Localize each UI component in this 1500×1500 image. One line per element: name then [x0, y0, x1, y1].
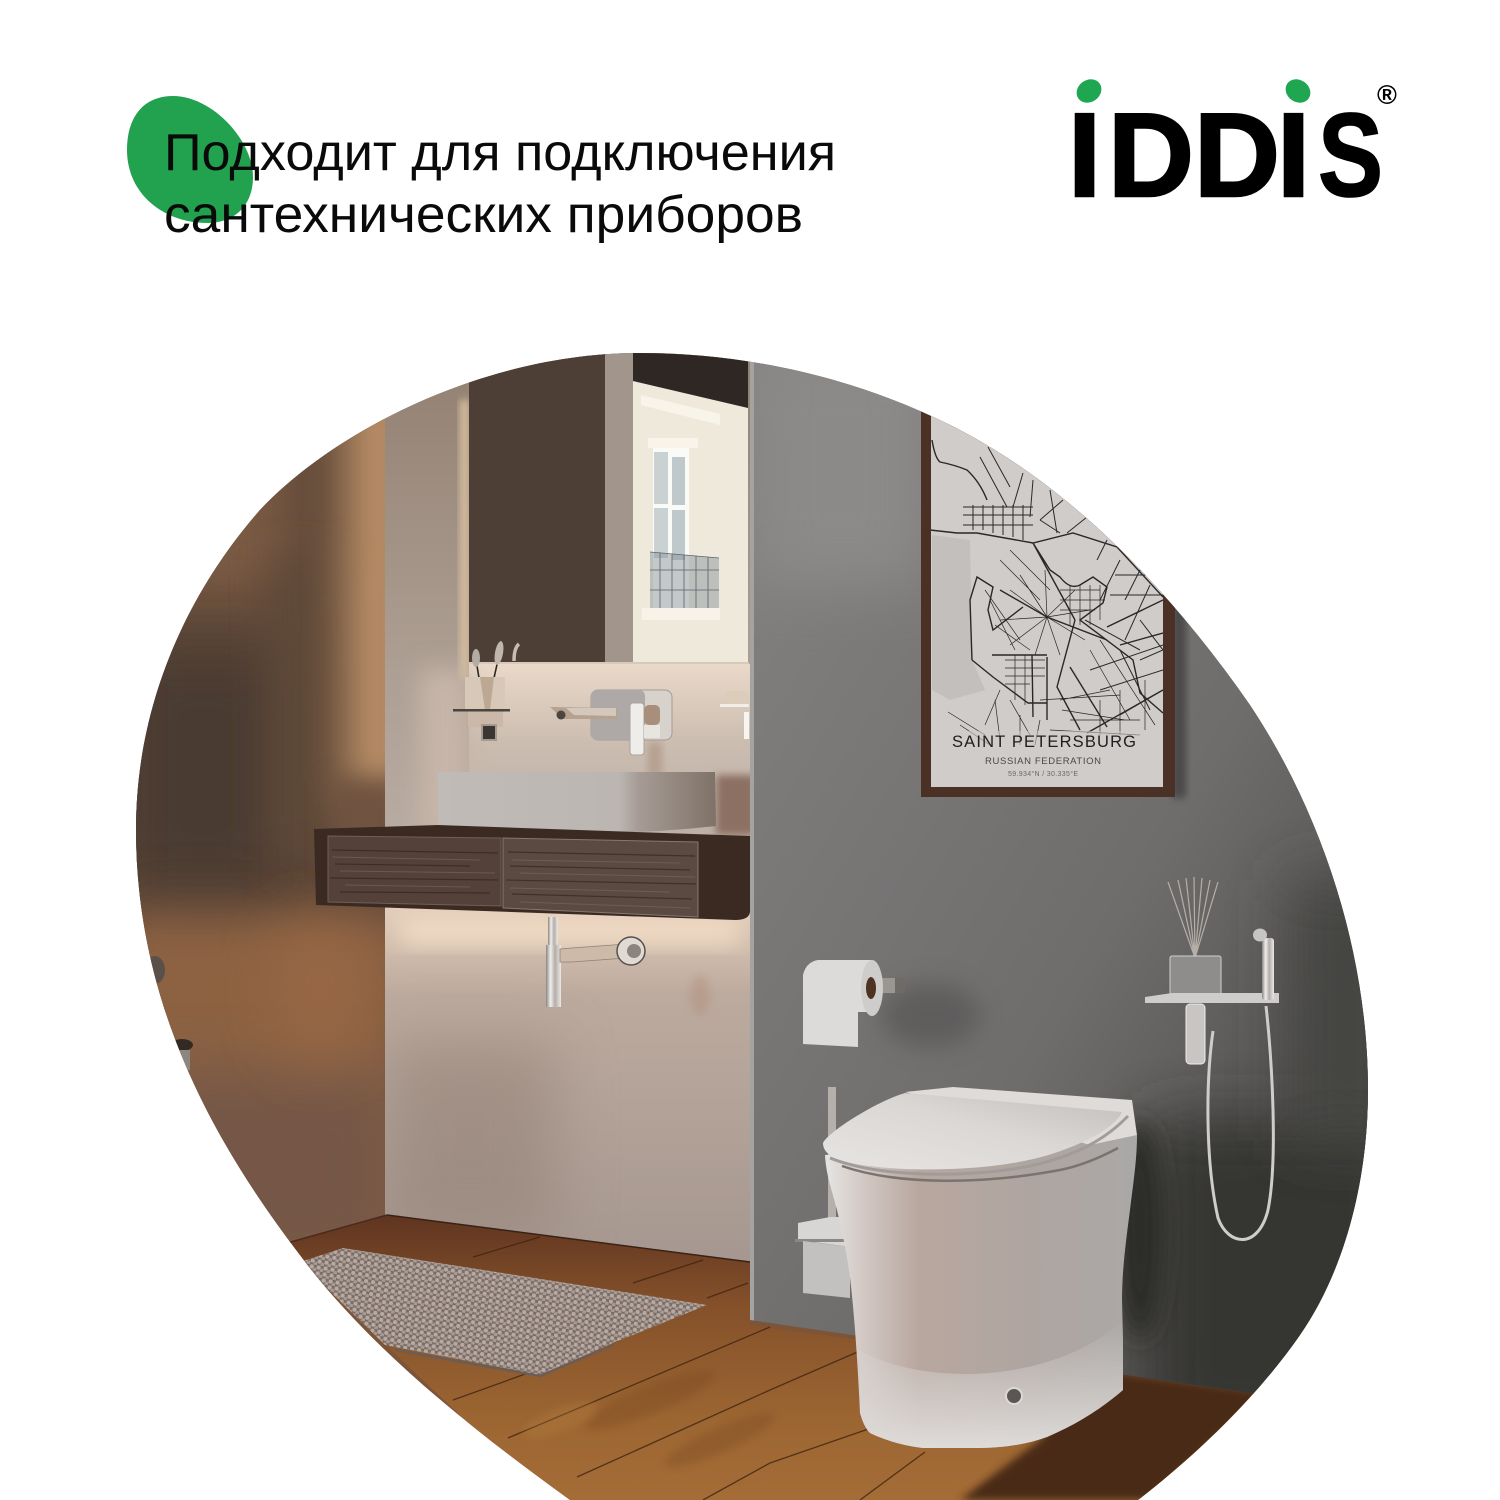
foreground stool fragment [145, 956, 193, 1070]
poster city name: SAINT PETERSBURG [952, 733, 1136, 751]
logo letters: IDDI [1068, 89, 1310, 222]
floor [280, 1215, 1300, 1500]
poster paper [931, 410, 1163, 787]
mirror: dark blinds [633, 350, 748, 408]
vanity panel right [503, 838, 698, 917]
mirror: dark reflection [469, 350, 606, 663]
mirror bottom edge [469, 662, 749, 664]
mirror [469, 350, 749, 664]
rug [300, 1248, 707, 1376]
wall faucet [550, 690, 672, 776]
reflected building window [641, 395, 720, 620]
poster coordinates: 59.934°N / 30.335°E [1008, 770, 1078, 778]
shower head [1262, 938, 1274, 1000]
basin [438, 772, 716, 832]
mirror: door frame reflection [605, 350, 634, 663]
toilet paper holder [803, 960, 905, 1047]
subtitle line: сантехнических приборов [164, 186, 803, 244]
diffuser reeds [1168, 877, 1218, 958]
green blob behind title [127, 96, 253, 223]
toilet [823, 1087, 1137, 1448]
logo: IDDIS [1068, 75, 1397, 222]
metal shelf [1145, 993, 1279, 1003]
poster country: RUSSIAN FEDERATION [985, 756, 1101, 767]
poster bottom rail [921, 787, 1175, 797]
photo: bathroom scene in blob mask [110, 340, 1410, 1500]
title: Подходит для подключения [164, 124, 836, 182]
grey wall [750, 362, 1368, 1394]
flexible hose [1208, 1006, 1273, 1240]
logo green dot left [1072, 75, 1106, 107]
logo letter S: S [1318, 89, 1383, 222]
map water areas [932, 535, 985, 700]
mixer handle plate [1186, 1004, 1205, 1064]
left wall [136, 418, 385, 1270]
toilet tank strip [905, 1087, 1137, 1145]
middle wall [385, 340, 756, 1280]
floor grain shading [522, 1376, 770, 1466]
street map [930, 440, 1163, 745]
toothbrush cup on shelf [453, 640, 519, 740]
glass vase [1170, 956, 1221, 997]
toilet lid [823, 1093, 1122, 1169]
toilet bowl body [825, 1135, 1137, 1448]
vanity countertop [314, 825, 750, 920]
logo green dot right [1281, 75, 1315, 107]
registered mark: ® [1377, 80, 1397, 110]
hygienic shower set [1145, 877, 1279, 1240]
right shelf fragment [720, 704, 749, 739]
toilet bowl lower highlight [860, 1333, 1123, 1448]
poster frame [921, 410, 1175, 797]
floor dark shadow right [960, 1370, 1270, 1500]
lid shadow rim [830, 1116, 1128, 1174]
sink trap [546, 917, 645, 1007]
framed map poster [921, 410, 1186, 798]
mirror: window reflection [633, 350, 748, 663]
vanity panel left [328, 836, 501, 906]
flush button [1006, 1388, 1022, 1404]
toilet brush holder [795, 1087, 850, 1298]
poster title background [968, 731, 1140, 746]
